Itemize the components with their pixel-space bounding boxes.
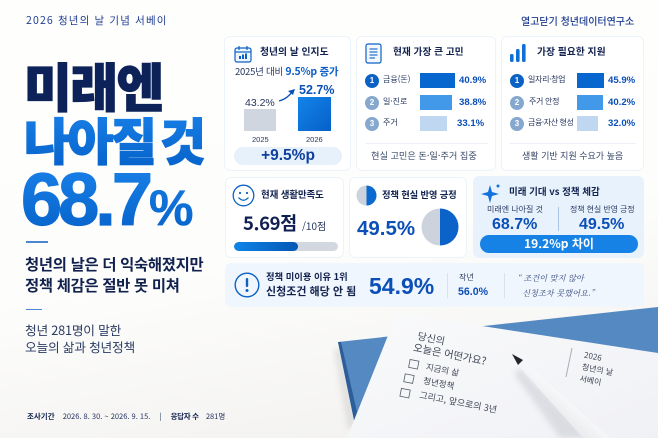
panel: life satisfaction (225, 177, 344, 258)
footer: survey information: 조사기간 2026. 8. 30. ~ 2026. 9. 15. | 응답자 수 281명 (27, 411, 225, 422)
arrow (278, 89, 295, 102)
quote: 신청조차 못했어요.” (522, 288, 594, 299)
title (21, 50, 204, 235)
photo: survey paper, folder and pen: 오늘은 어떤가요? (412, 339, 488, 368)
heading: 정책 현실 반영 긍정 (382, 187, 457, 201)
left label: 미래엔 나아질 것 (487, 204, 543, 215)
icon: smile (232, 184, 254, 206)
title line 2: 나아질 것 (24, 103, 204, 175)
panel: awareness (224, 36, 351, 171)
row 1: 금융(돈) (383, 74, 410, 85)
description (25, 320, 135, 356)
label 2025: 2025 (252, 135, 269, 144)
row 3: 33.1% (457, 118, 484, 129)
headline value: 54.9% (369, 273, 434, 299)
difference pill (480, 235, 638, 253)
row 2 (510, 95, 635, 110)
row 1: 일자리·창업 (528, 74, 565, 85)
row 3 (510, 116, 635, 131)
bar 2025 (244, 109, 276, 131)
description: 오늘의 삶과 청년정책 (25, 337, 135, 356)
value 2026: 52.7% (299, 83, 334, 97)
last year value: 56.0% (458, 286, 488, 298)
score denominator: /10점 (302, 218, 326, 233)
photo: survey paper, folder and pen: 당신의 (416, 328, 446, 348)
last year label: 작년 (459, 272, 474, 283)
row 3: 32.0% (608, 118, 635, 129)
panel: policy reflection (349, 177, 467, 258)
row 2: 40.2% (608, 97, 635, 108)
icon: small pie (356, 186, 376, 206)
subtitle: 청년의 날은 더 익숙해졌지만 (25, 253, 203, 275)
subtitle (25, 253, 204, 296)
row 3: 주거 (383, 117, 398, 128)
value 2025: 43.2% (245, 97, 275, 109)
row 3: 3 (515, 119, 519, 128)
heading: 현재 가장 큰 고민 (393, 44, 464, 58)
row 1 (510, 73, 635, 88)
reason label: 정책 미이용 이유 1위 (266, 269, 348, 283)
icon: document (365, 43, 382, 64)
row 3: 3 (370, 119, 374, 128)
subtitle: 정책 체감은 절반 못 미쳐 (25, 274, 180, 296)
photo: survey paper, folder and pen (334, 307, 658, 438)
row 1: 40.9% (459, 75, 486, 86)
label 2026: 2026 (306, 135, 323, 144)
change pill (234, 147, 342, 165)
row 1: 1 (370, 76, 374, 85)
survey label: 2026 청년의 날 기념 서베이 (26, 13, 168, 28)
panel: reason for non-use (225, 263, 644, 307)
photo: survey paper, folder and pen: 청년의 날 (581, 361, 615, 378)
row 1: 1 (515, 76, 519, 85)
icon: sparkle (481, 184, 500, 203)
icon: bars (510, 44, 526, 62)
organization name: 열고닫기 청년데이터연구소 (521, 13, 634, 28)
description: 청년 281명이 말한 (25, 320, 121, 339)
row 2: 2 (515, 98, 519, 107)
photo: survey paper, folder and pen: 2026 (583, 350, 603, 364)
row 2: 38.8% (459, 97, 486, 108)
panel: most needed support (501, 36, 644, 171)
row 3 (365, 116, 484, 131)
takeaway: 생활 기반 지원 수요가 높음 (522, 149, 623, 162)
pie chart (422, 208, 458, 246)
takeaway: 현실 고민은 돈·일·주거 집중 (371, 148, 477, 162)
heading: 현재 생활만족도 (261, 187, 324, 201)
row 3: 금융·자산 형성 (528, 117, 573, 128)
change pill: +9.5%p (261, 147, 315, 164)
quote (517, 273, 596, 299)
row 1 (365, 73, 486, 88)
bar 2026 (298, 97, 331, 131)
photo: survey paper, folder and pen: 서베이 (579, 373, 602, 388)
row 2: 2 (370, 98, 374, 107)
photo: survey paper, folder and pen: 그리고, 앞으로의 3년 (418, 388, 498, 416)
value: 49.5% (357, 217, 415, 240)
row 2: 일·진로 (383, 96, 407, 107)
difference pill: 19.2%p 차이 (524, 235, 594, 252)
quote: “ 조건이 맞지 않아 (517, 273, 584, 284)
right label: 정책 현실 반영 긍정 (570, 204, 634, 215)
row 1: 45.9% (608, 75, 635, 86)
heading: 미래 기대 vs 정책 체감 (509, 184, 600, 198)
heading: 가장 필요한 지원 (537, 44, 606, 58)
score: 5.69점 (243, 210, 297, 236)
comparison note: 2025년 대비 9.5%p 증가 (235, 64, 338, 79)
row 2 (365, 95, 486, 110)
heading: 청년의 날 인지도 (260, 44, 329, 58)
row 2: 주거 안정 (529, 96, 559, 107)
photo: survey paper, folder and pen: 지금의 삶 (425, 361, 460, 379)
left value: 68.7% (492, 216, 537, 233)
right value: 49.5% (579, 216, 624, 233)
panel: biggest worries (356, 36, 496, 171)
reason text: 신청조건 해당 안 됨 (266, 283, 356, 299)
panel: expectation vs perception (473, 176, 644, 258)
photo: survey paper, folder and pen: 청년정책 (422, 374, 455, 392)
progress bar (234, 242, 338, 251)
icon: exclamation (234, 272, 260, 298)
icon: calendar (234, 46, 252, 63)
